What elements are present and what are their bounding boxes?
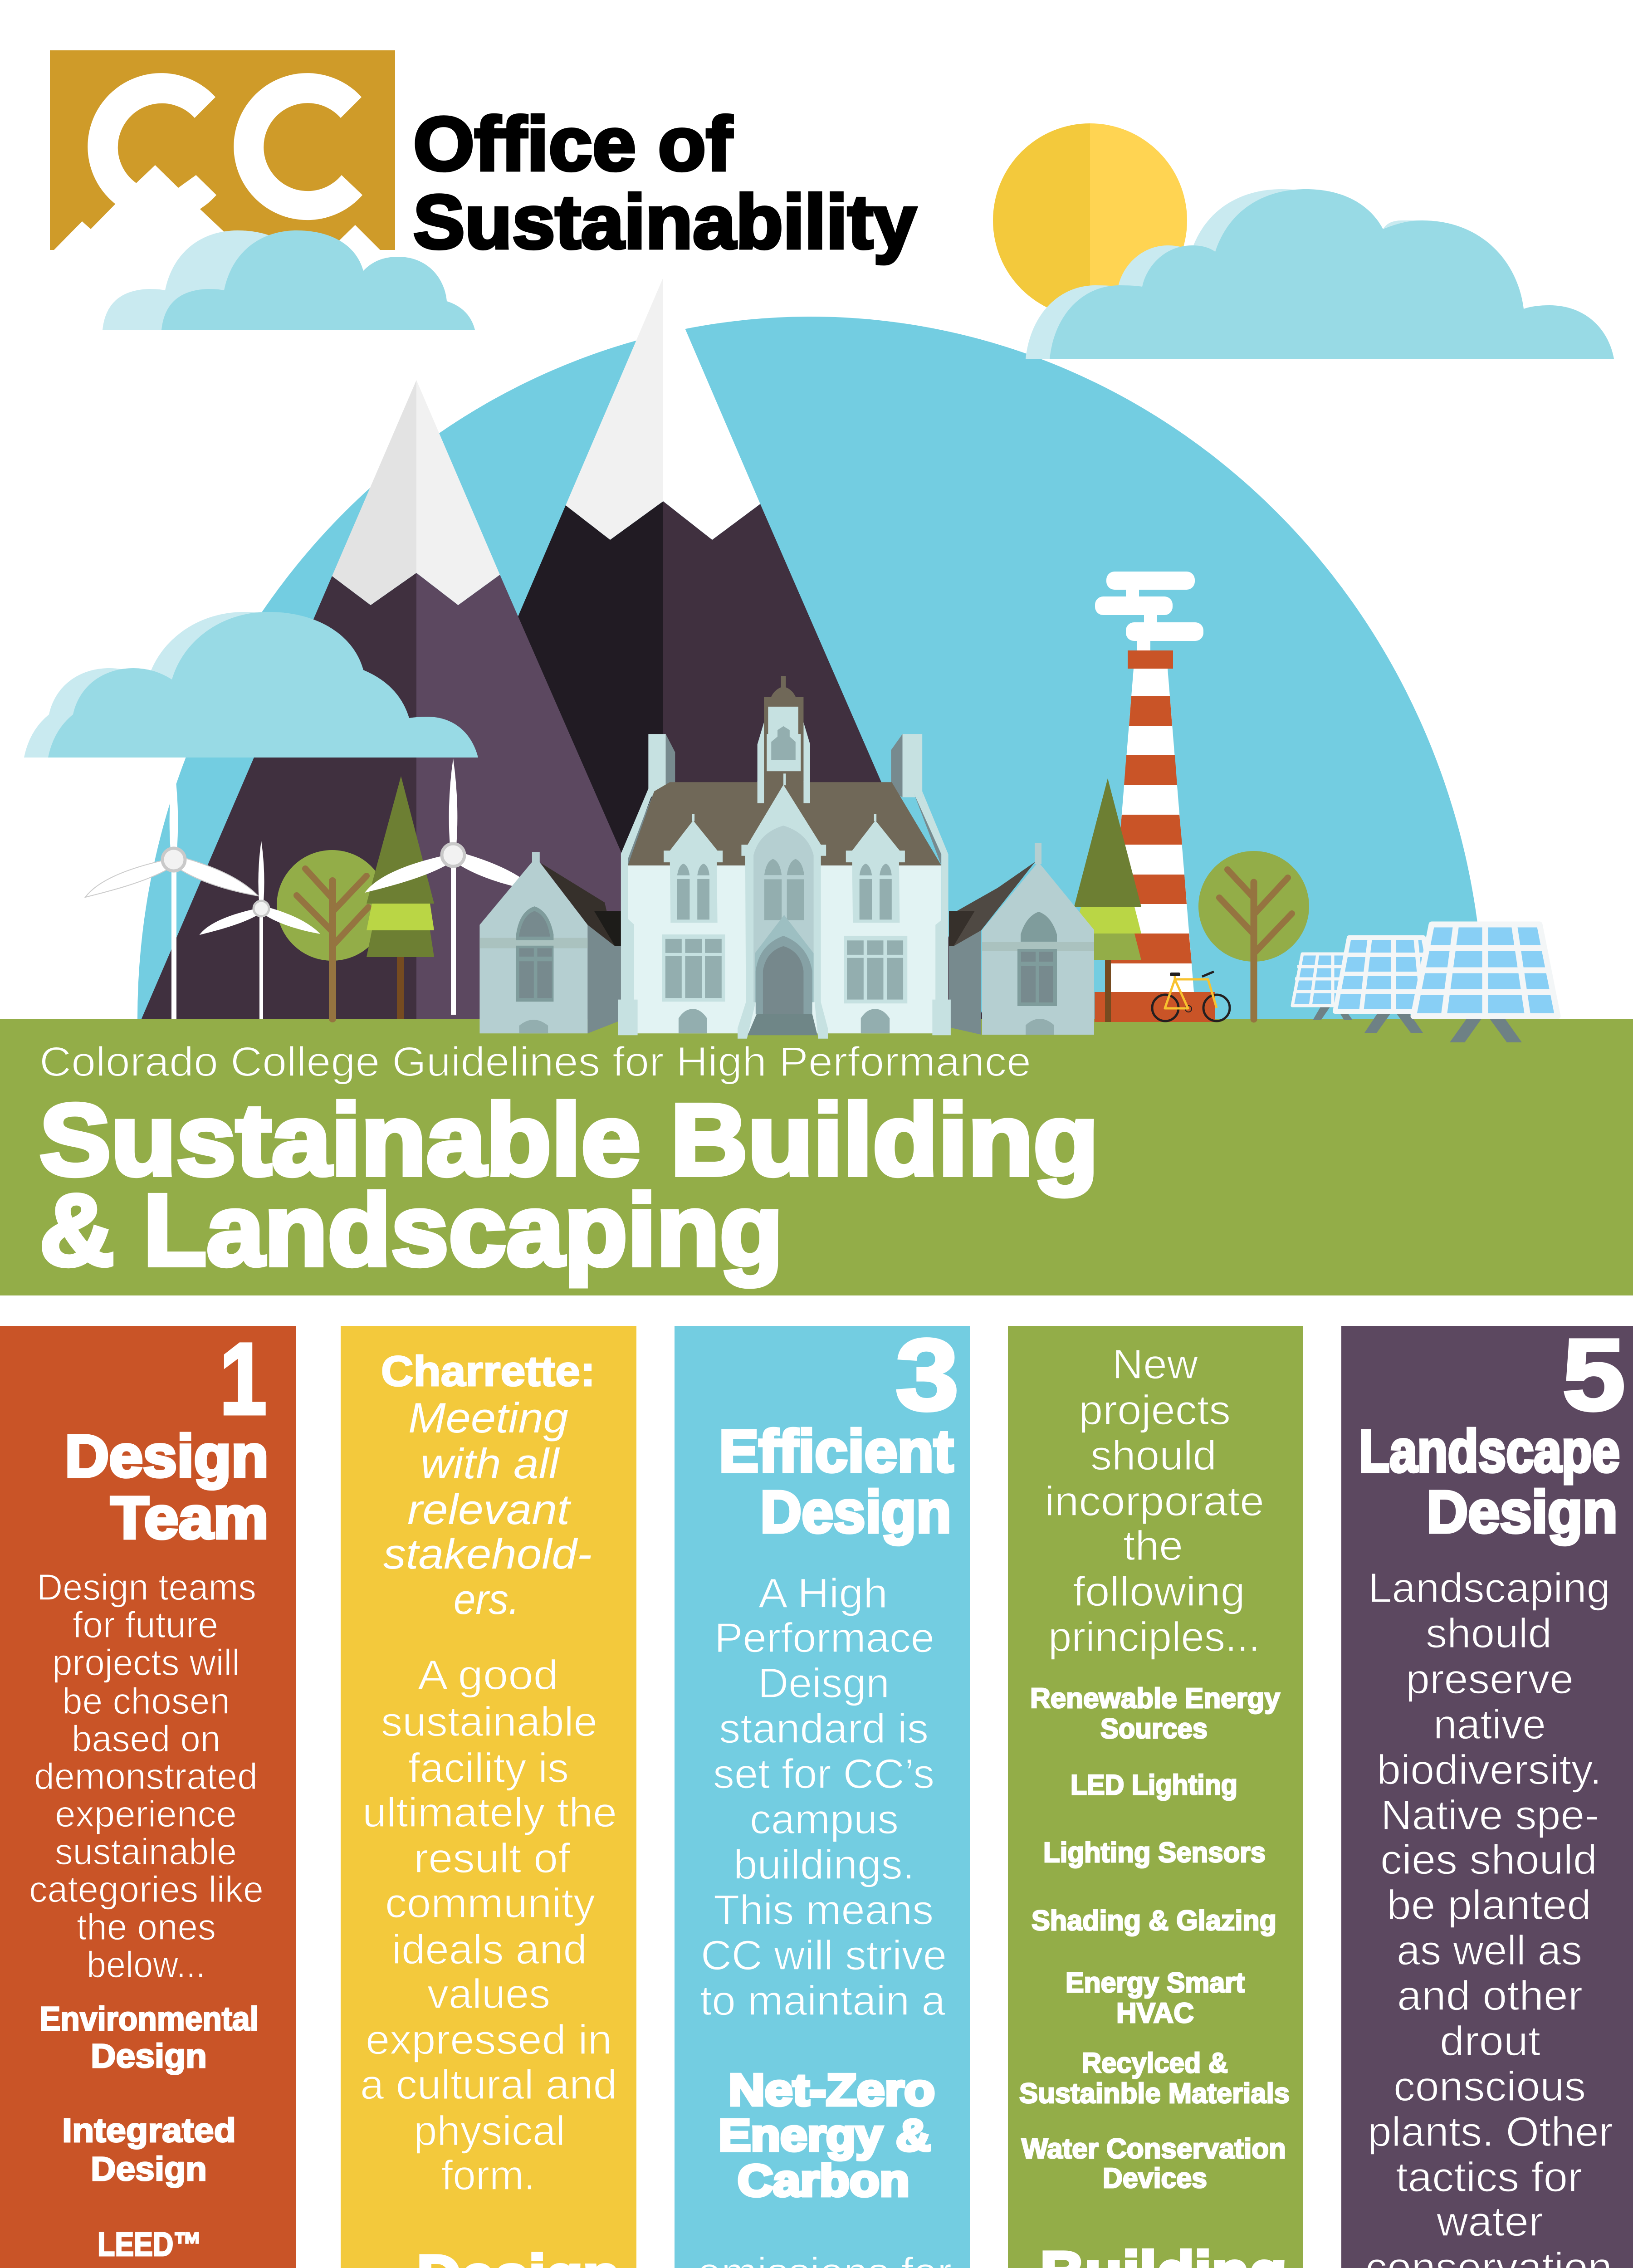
panel background	[1008, 1326, 1303, 2268]
heading	[719, 1418, 953, 1545]
principles list: HVAC	[1116, 1998, 1194, 2029]
body text: conscious	[1393, 2063, 1586, 2110]
mountain: left	[142, 380, 694, 1019]
building: main hall	[618, 676, 951, 1039]
certification list: Design	[91, 2150, 207, 2188]
wind turbine: large left	[85, 763, 258, 1019]
panel background	[675, 1326, 970, 2268]
central gable	[738, 773, 828, 1039]
intro text: CC will strive	[701, 1932, 947, 1979]
logo background	[50, 50, 395, 250]
body text	[1365, 1565, 1613, 2268]
dormer right	[846, 814, 905, 923]
intro text: buildings.	[733, 1842, 914, 1888]
definition	[381, 1347, 595, 1623]
principles list: Sustainble Materials	[1019, 2078, 1290, 2109]
principles list: Shading & Glazing	[1032, 1905, 1276, 1936]
intro text: to maintain a	[700, 1978, 946, 2024]
tree: left pine	[367, 776, 434, 1019]
callout: net-zero: Energy &	[719, 2110, 931, 2160]
intro text: following	[1073, 1569, 1245, 1615]
roof	[628, 782, 941, 865]
mountain: right large	[346, 278, 984, 1019]
intro text	[1045, 1341, 1264, 1660]
principles list: Energy Smart	[1066, 1967, 1245, 1999]
body text: drout	[1440, 2018, 1540, 2064]
title: office of sustainability	[413, 101, 916, 264]
intro text: Performace	[714, 1615, 934, 1661]
main title: Sustainable Building	[39, 1083, 1099, 1197]
blue dome sky	[137, 317, 1484, 1019]
panel background	[1341, 1326, 1633, 2268]
intro text: for future	[73, 1604, 218, 1646]
building: right wing	[949, 843, 1094, 1035]
principles list: Recylced &	[1082, 2048, 1228, 2079]
body text	[360, 1652, 617, 2199]
callout: net-zero: Carbon	[738, 2156, 909, 2205]
principles list: Lighting Sensors	[1043, 1837, 1266, 1868]
body text: values	[427, 1971, 550, 2017]
intro text	[700, 1570, 947, 2024]
side buttresses	[618, 789, 951, 1035]
body text: plants. Other	[1368, 2109, 1613, 2155]
intro text: categories like	[29, 1869, 264, 1910]
principles list: Devices	[1103, 2163, 1207, 2194]
tree: right round	[1198, 851, 1309, 1019]
cloud: left over mountains	[24, 612, 478, 758]
title: office of sustainability: Office of	[413, 101, 733, 186]
body text: result of	[414, 1835, 570, 1882]
panel: design charrette	[341, 1326, 636, 2268]
certification list: Environmental	[39, 2000, 259, 2038]
principles list: Water Conservation	[1022, 2133, 1286, 2165]
body text: expressed in	[366, 2017, 612, 2063]
body text: Native spe-	[1381, 1792, 1599, 1838]
window left	[662, 934, 725, 1002]
intro text: set for CC’s	[713, 1751, 934, 1797]
intro text: A High	[758, 1570, 888, 1617]
wind turbine: small	[200, 841, 320, 1019]
body text: Landscaping	[1368, 1565, 1610, 1611]
intro text: incorporate	[1045, 1478, 1264, 1525]
definition: Charrette:	[381, 1347, 595, 1395]
chimney with smoke	[1095, 572, 1215, 1022]
panel: design team	[0, 1322, 296, 2268]
title: office of sustainability: Sustainability	[413, 179, 916, 264]
body text: A good	[418, 1652, 558, 1698]
intro text: projects will	[52, 1642, 240, 1683]
definition: relevant	[407, 1486, 572, 1533]
building: left wing	[479, 852, 621, 1033]
definition: with all	[420, 1440, 560, 1487]
body text: be planted	[1387, 1882, 1591, 1928]
heading: Team	[111, 1484, 269, 1551]
heading: Design	[65, 1422, 269, 1489]
icon: bicycle	[1152, 972, 1230, 1021]
certification list	[39, 2000, 259, 2268]
principles list: LED Lighting	[1071, 1769, 1237, 1801]
body text: physical	[414, 2108, 565, 2154]
body text: facility is	[408, 1745, 569, 1791]
intro text: campus	[750, 1796, 899, 1843]
heading	[1359, 1418, 1620, 1545]
dormer left	[664, 814, 723, 923]
body text: should	[1426, 1610, 1552, 1657]
chimneys	[648, 734, 922, 797]
body text: and other	[1397, 1973, 1583, 2019]
body text: preserve	[1406, 1656, 1574, 1702]
intro text: New	[1112, 1341, 1198, 1388]
icon: sun	[993, 123, 1187, 318]
intro text: below...	[87, 1944, 205, 1985]
body text: ultimately the	[362, 1789, 617, 1836]
cloud: right top	[1026, 189, 1614, 359]
main wall	[628, 865, 941, 1033]
heading: Design	[1427, 1478, 1618, 1545]
tree: left round	[277, 850, 387, 1019]
body text: cies should	[1380, 1837, 1597, 1883]
panel: building design	[1008, 1326, 1303, 2268]
callout: net-zero: Net-Zero	[728, 2065, 935, 2115]
cloud: under logo	[103, 230, 475, 330]
body text: native	[1433, 1701, 1546, 1748]
ground floor doors	[679, 1009, 890, 1033]
principles list: Renewable Energy	[1030, 1683, 1281, 1714]
intro text: This means	[714, 1887, 934, 1933]
intro text: the	[1123, 1523, 1183, 1569]
logo mountain	[54, 165, 380, 250]
intro text: should	[1090, 1432, 1217, 1479]
logo	[50, 50, 395, 250]
solar panels	[1292, 924, 1558, 1042]
panel: landscape design	[1341, 1318, 1633, 2268]
intro text: demonstrated	[34, 1756, 258, 1797]
intro text: Design teams	[37, 1567, 256, 1608]
main title	[39, 1083, 1099, 1287]
intro text: the ones	[77, 1906, 216, 1948]
step number 5: 5	[1562, 1318, 1625, 1432]
definition: ers.	[454, 1575, 519, 1623]
body text: community	[385, 1880, 595, 1926]
main title: & Landscaping	[39, 1173, 783, 1287]
wind turbine: right of pine	[365, 758, 538, 1015]
principles list: Sources	[1100, 1713, 1208, 1745]
panel background	[0, 1326, 296, 2268]
intro text: be chosen	[62, 1681, 230, 1722]
body text: water	[1436, 2199, 1543, 2245]
heading: Efficient	[719, 1418, 953, 1484]
bell tower	[758, 676, 810, 803]
logo letters	[88, 73, 362, 220]
intro text: sustainable	[55, 1831, 237, 1872]
definition: Meeting	[408, 1394, 568, 1442]
intro text: standard is	[719, 1706, 929, 1752]
body text: a cultural and	[360, 2062, 617, 2108]
intro text: principles...	[1048, 1614, 1260, 1660]
callout: net-zero	[719, 2065, 935, 2205]
intro text	[29, 1567, 264, 1985]
step number 3: 3	[895, 1318, 959, 1432]
intro text: Deisgn	[758, 1660, 890, 1706]
heading	[65, 1422, 269, 1551]
step number 1: 1	[220, 1322, 267, 1436]
certification list: Design	[91, 2037, 207, 2075]
body text: ideals and	[392, 1926, 587, 1973]
body text: tactics for	[1396, 2154, 1582, 2200]
intro text: projects	[1079, 1387, 1231, 1433]
ground	[0, 1019, 1633, 1295]
heading: Design	[760, 1478, 951, 1545]
principles list	[1019, 1683, 1290, 2194]
panel background	[341, 1326, 636, 2268]
body text: form.	[441, 2152, 535, 2199]
subtitle: Colorado College Guidelines for High Performance	[39, 1039, 1031, 1085]
certification list: LEED™	[98, 2225, 202, 2263]
hero scene	[0, 123, 1633, 1295]
definition: stakehold-	[383, 1530, 592, 1578]
certification list: Integrated	[62, 2112, 236, 2149]
panel: efficient design	[675, 1318, 970, 2268]
tower legs over roof	[758, 781, 810, 803]
intro text: experience	[55, 1794, 237, 1835]
tree: right pine	[1074, 778, 1141, 1022]
body text: sustainable	[381, 1699, 597, 1745]
body text: biodiversity.	[1377, 1747, 1602, 1793]
body text: as well as	[1397, 1927, 1582, 1974]
window right	[844, 936, 907, 1003]
intro text: based on	[72, 1718, 220, 1760]
